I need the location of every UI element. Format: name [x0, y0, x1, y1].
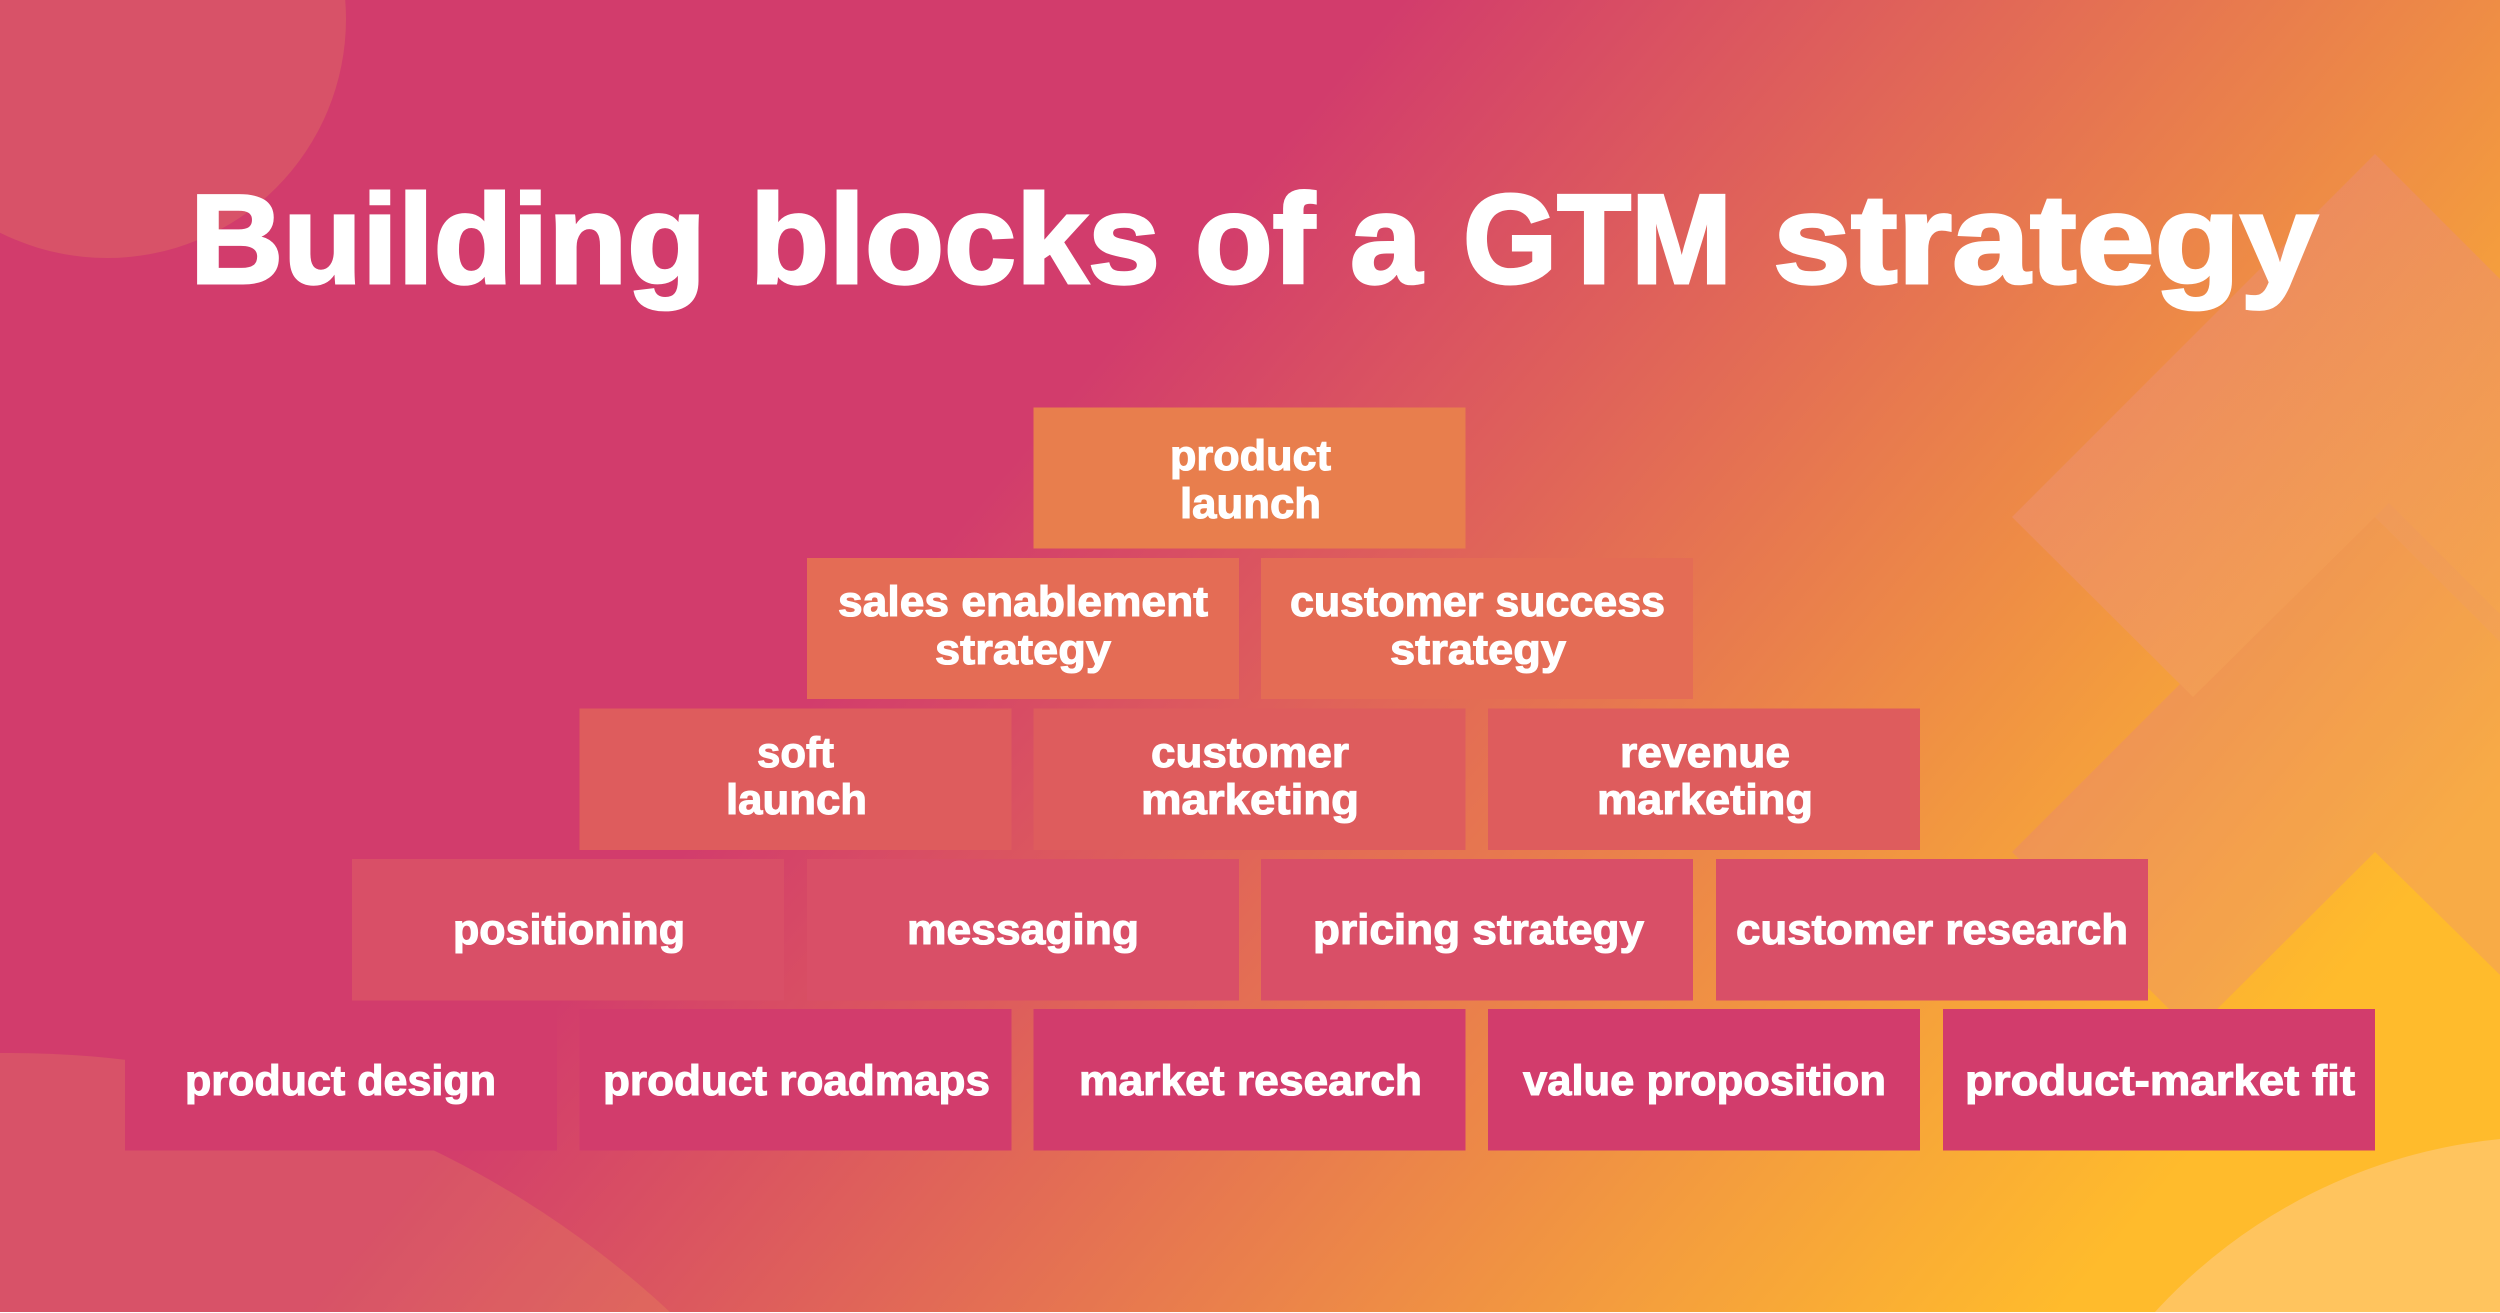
- row 4 block: positioning: [352, 859, 784, 1000]
- title: blocks: [750, 168, 1160, 310]
- decoration: bottom-left circle: [0, 1053, 670, 1312]
- row 5 block: market research: market research: [1079, 1057, 1422, 1105]
- row 3 block: revenue marketing: [1488, 708, 1920, 850]
- row 5 block: product-market fit: product-market fit: [1965, 1057, 2355, 1105]
- row 5 block: market research: [1034, 1009, 1466, 1150]
- decoration: bottom-right circle: [2155, 1139, 2500, 1312]
- row 3 block: soft launch: soft: [757, 729, 834, 777]
- decoration: chevron overlap band: [2375, 503, 2500, 642]
- row 2 block: customer success strategy: strategy: [1390, 626, 1566, 674]
- row 5 block: value proposition: [1488, 1009, 1920, 1150]
- row 4 block: pricing strategy: pricing strategy: [1313, 906, 1644, 954]
- decoration: lower chevron: [2012, 517, 2500, 1033]
- row 2 block: customer success strategy: [1261, 558, 1693, 699]
- row 2 block: sales enablement strategy: strategy: [935, 626, 1111, 674]
- row 5 block: product roadmaps: product roadmaps: [603, 1057, 990, 1105]
- row 5 block: product roadmaps: [580, 1009, 1012, 1150]
- row 4 block: positioning: positioning: [453, 906, 685, 954]
- row 2 block: customer success strategy: customer success: [1290, 578, 1665, 626]
- pyramid of building blocks: [125, 408, 2375, 1150]
- row 4 block: customer research: [1716, 859, 2148, 1000]
- row 4 block: customer research: customer research: [1736, 906, 2128, 954]
- title: GTM: [1463, 168, 1732, 310]
- row 5 block: value proposition: value proposition: [1523, 1057, 1886, 1105]
- decoration: upper chevron: [2012, 154, 2500, 697]
- title: Building: [190, 168, 706, 310]
- row 5 block: product design: [125, 1009, 557, 1150]
- row 3 block: soft launch: [580, 708, 1012, 850]
- row 4 block: pricing strategy: [1261, 859, 1693, 1000]
- row 3 block: customer marketing: marketing: [1141, 776, 1359, 824]
- row 1 block: product launch: launch: [1180, 480, 1321, 528]
- row 2 block: sales enablement strategy: [807, 558, 1239, 699]
- row 5 block: product design: product design: [185, 1057, 496, 1105]
- row 3 block: revenue marketing: revenue: [1620, 729, 1790, 777]
- row 3 block: customer marketing: customer: [1151, 729, 1349, 777]
- row 3 block: revenue marketing: marketing: [1597, 776, 1813, 824]
- row 4 block: messaging: messaging: [907, 906, 1139, 954]
- title: of: [1195, 168, 1316, 310]
- row 1 block: product launch: [1034, 408, 1466, 548]
- row 1 block: product launch: product: [1170, 432, 1331, 480]
- row 3 block: soft launch: launch: [726, 776, 867, 824]
- decoration: top-left circle: [0, 0, 346, 258]
- title: strategy: [1773, 168, 2318, 310]
- row 5 block: product-market fit: [1943, 1009, 2375, 1150]
- title: a: [1350, 168, 1423, 310]
- row 4 block: messaging: [807, 859, 1239, 1000]
- row 2 block: sales enablement strategy: sales enablement: [838, 578, 1208, 626]
- title: [190, 168, 2318, 310]
- row 3 block: customer marketing: [1034, 708, 1466, 850]
